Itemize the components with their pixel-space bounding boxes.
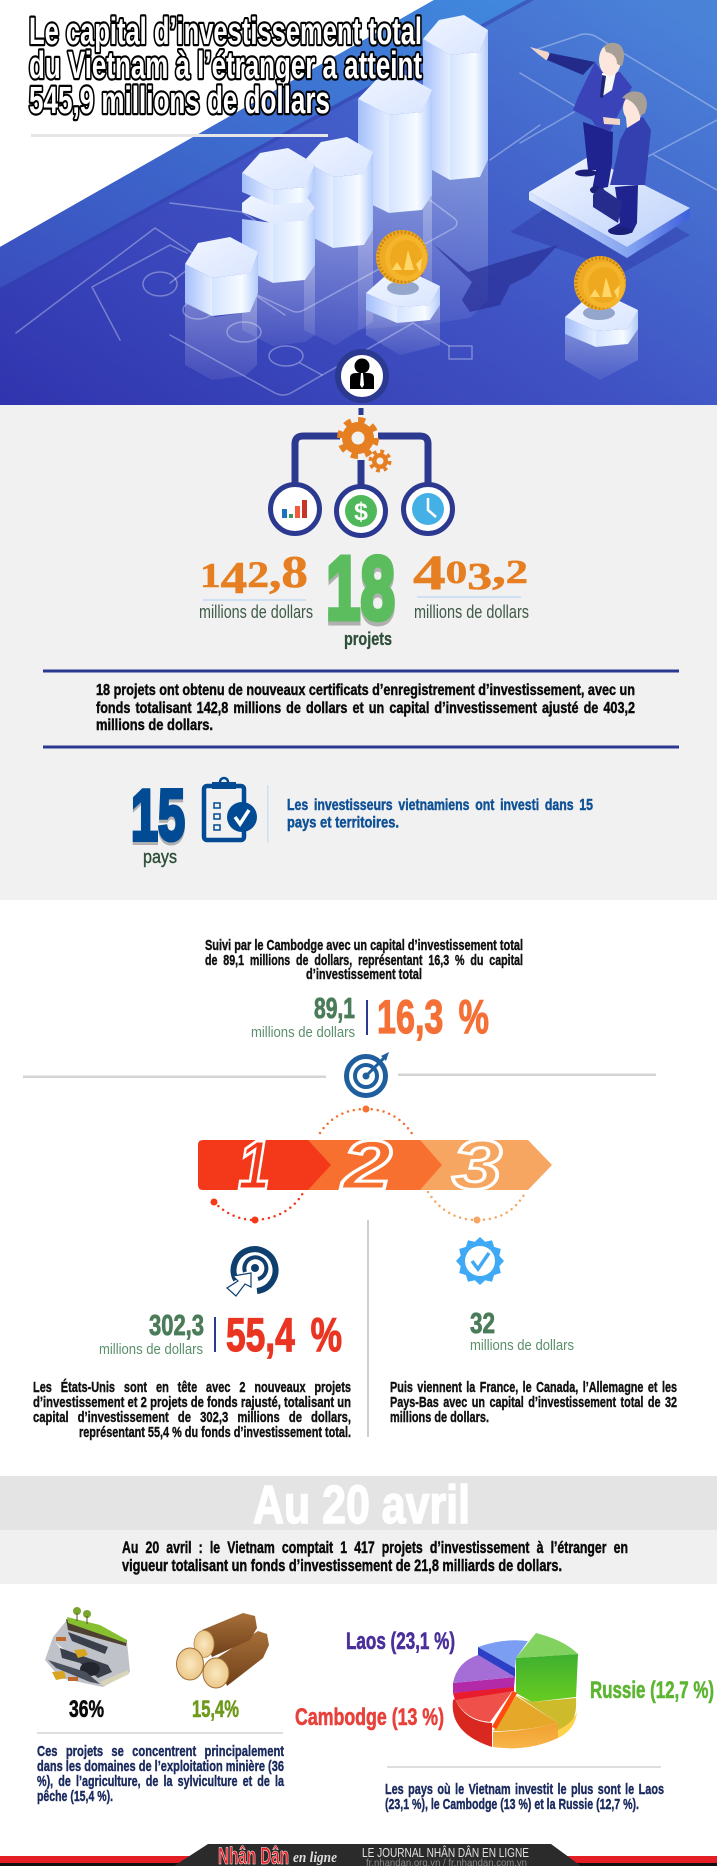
icon: clipboard bbox=[204, 778, 257, 840]
text block: sectors bbox=[37, 1743, 284, 1805]
stat: 403,2: 3 bbox=[467, 556, 492, 598]
pie label: Cambodge: Cambodge (13 %) bbox=[295, 1704, 444, 1731]
icon: target with cursor bbox=[227, 1249, 276, 1296]
stat: 403,2: , bbox=[492, 547, 506, 593]
man 1 bbox=[583, 122, 613, 190]
dotted curves bbox=[214, 1109, 525, 1220]
white corner behind title bbox=[0, 0, 434, 247]
stat: 142,8: 1 bbox=[200, 556, 221, 595]
icon: verified badge bbox=[456, 1237, 504, 1285]
text block: 15 countries: Les investisseurs vietnamiens ont investi dans 15 bbox=[287, 797, 593, 814]
stat: 18 projets: 18 bbox=[326, 543, 395, 643]
text block: 15 countries bbox=[287, 797, 593, 832]
org chart icons bbox=[270, 408, 452, 536]
stat: 32 millions: 32 bbox=[470, 1308, 495, 1340]
text block: United States: capital d’investissement de 302,3 millions de dollars, bbox=[33, 1409, 351, 1426]
stat: 32 millions: millions de dollars bbox=[470, 1338, 574, 1354]
stat: Cambodia figures bbox=[251, 990, 489, 1043]
steps arrow 1-2-3 bbox=[198, 1106, 552, 1224]
icon: dollar: $ bbox=[354, 498, 368, 526]
stat: 403,2: 4 bbox=[413, 544, 446, 600]
arrow segment 3 bbox=[420, 1126, 552, 1204]
text block: sectors: dans les domaines de l’exploitation minière (36 bbox=[37, 1758, 284, 1775]
footer bbox=[0, 1843, 717, 1866]
title bbox=[29, 11, 422, 122]
arrow segment 1: 1 bbox=[238, 1126, 270, 1204]
icon: target bbox=[346, 1052, 389, 1096]
floor shadow bbox=[432, 243, 558, 312]
stat: Cambodia figures: millions de dollars bbox=[251, 1025, 355, 1041]
stat: 36%: 36% bbox=[69, 1696, 104, 1723]
panel: April summary: vigueur totalisant un fonds d’investissement de 21,8 milliards de dollars. bbox=[122, 1557, 562, 1575]
pie chart bbox=[453, 1633, 578, 1748]
stat: Cambodia figures: 89,1 bbox=[314, 993, 355, 1025]
text block: United States: d’investissement et 2 projets de fonds rajusté, totalisant un bbox=[33, 1394, 351, 1411]
upper log bbox=[194, 1613, 257, 1658]
stat: 15 pays: pays bbox=[143, 847, 177, 867]
text block: 15 countries: pays et territoires. bbox=[287, 814, 399, 832]
arrow segment 2: 2 bbox=[339, 1126, 392, 1204]
panel: April summary bbox=[0, 1530, 717, 1584]
stat: United States figures: 55,4 % bbox=[226, 1308, 342, 1361]
stat: 142,8: 2 bbox=[247, 555, 269, 596]
text block: United States: Les États-Unis sont en tête avec 2 nouveaux projets bbox=[33, 1379, 351, 1396]
stat: 18 projets: 18 bbox=[326, 539, 395, 639]
stat: 142,8: 4 bbox=[221, 553, 247, 603]
icon: dollar bbox=[336, 486, 386, 536]
text block: United States bbox=[33, 1379, 351, 1441]
stat: 18 projets bbox=[326, 539, 395, 649]
panel: projects section background bbox=[0, 405, 717, 900]
stat: 403,2: millions de dollars bbox=[414, 602, 529, 622]
icon: bar chart bbox=[270, 484, 320, 534]
platform with figures bbox=[510, 43, 690, 272]
stat: 403,2: 0 bbox=[446, 555, 467, 591]
stat: 15 pays bbox=[131, 776, 185, 867]
title: Le capital d’investissement total bbox=[29, 11, 422, 53]
stat: 18 projets: projets bbox=[344, 629, 392, 649]
stat: 15 pays: 15 bbox=[131, 776, 185, 856]
arrow segment 3: 3 bbox=[452, 1126, 502, 1204]
icon: investor bbox=[338, 352, 386, 400]
stat: United States figures bbox=[99, 1308, 342, 1361]
text block: France Canada Germany Netherlands: millions de dollars. bbox=[390, 1409, 489, 1426]
icon: clock bbox=[404, 484, 452, 534]
stat: 142,8 bbox=[199, 547, 313, 622]
stat: 142,8: ,8 bbox=[269, 547, 304, 597]
stat: 142,8: millions de dollars bbox=[199, 602, 313, 622]
text block: France Canada Germany Netherlands bbox=[390, 1379, 677, 1426]
icon: gears bbox=[340, 420, 390, 470]
stat: 32 millions bbox=[470, 1308, 574, 1354]
text block: United States: représentant 55,4 % du fonds d’investissement total. bbox=[79, 1424, 351, 1441]
hero banner bbox=[0, 0, 717, 405]
gold coins bbox=[376, 230, 626, 320]
publication name: LE JOURNAL NHÂN DÂN EN LIGNE bbox=[362, 1845, 529, 1860]
heading band: Au 20 avril bbox=[0, 1475, 717, 1535]
stat: 15,4%: 15,4% bbox=[192, 1696, 239, 1723]
reflections bbox=[185, 160, 638, 380]
text block: 18 projects description bbox=[43, 670, 679, 748]
text block: sectors: Ces projets se concentrent principalement bbox=[37, 1743, 284, 1760]
text block: sectors: %), de l’agriculture, de la sylviculture et de la bbox=[37, 1773, 284, 1790]
stat: Cambodia figures: 16,3 % bbox=[377, 990, 489, 1043]
stat: 403,2: 2 bbox=[506, 554, 528, 591]
title: du Vietnam à l’étranger a atteint bbox=[29, 45, 422, 87]
text block: Cambodia: de 89,1 millions de dollars, représentant 16,3 % du capital bbox=[205, 953, 523, 969]
stat: 15 pays: 15 bbox=[131, 779, 185, 859]
text block: Cambodia: Suivi par le Cambodge avec un capital d’investissement total bbox=[205, 938, 523, 954]
text block: Cambodia bbox=[205, 938, 523, 983]
left log bbox=[176, 1648, 204, 1680]
text block: top destinations bbox=[385, 1781, 664, 1813]
icon: mine bbox=[45, 1607, 130, 1687]
hexagonal columns bbox=[185, 15, 638, 347]
text block: sectors: pêche (15,4 %). bbox=[37, 1788, 113, 1805]
stat: United States figures: millions de dollars bbox=[99, 1342, 203, 1358]
heading band: Au 20 avril: Au 20 avril bbox=[253, 1475, 470, 1535]
icon: logs bbox=[176, 1613, 269, 1688]
stat: 403,2 bbox=[413, 544, 529, 622]
man 2 bbox=[608, 185, 638, 233]
logo: en ligne bbox=[293, 1850, 337, 1866]
stat: United States figures: 302,3 bbox=[149, 1310, 204, 1342]
pie label: Laos: Laos (23,1 %) bbox=[346, 1628, 455, 1655]
arrow segment 2 bbox=[308, 1126, 442, 1204]
right log bbox=[217, 1631, 269, 1686]
arrow segment 1 bbox=[198, 1126, 331, 1204]
text block: Cambodia: d’investissement total bbox=[306, 967, 422, 983]
text block: 18 projects description: millions de dollars. bbox=[96, 717, 213, 734]
publication name bbox=[362, 1845, 529, 1866]
title: 545,9 millions de dollars bbox=[29, 80, 330, 122]
